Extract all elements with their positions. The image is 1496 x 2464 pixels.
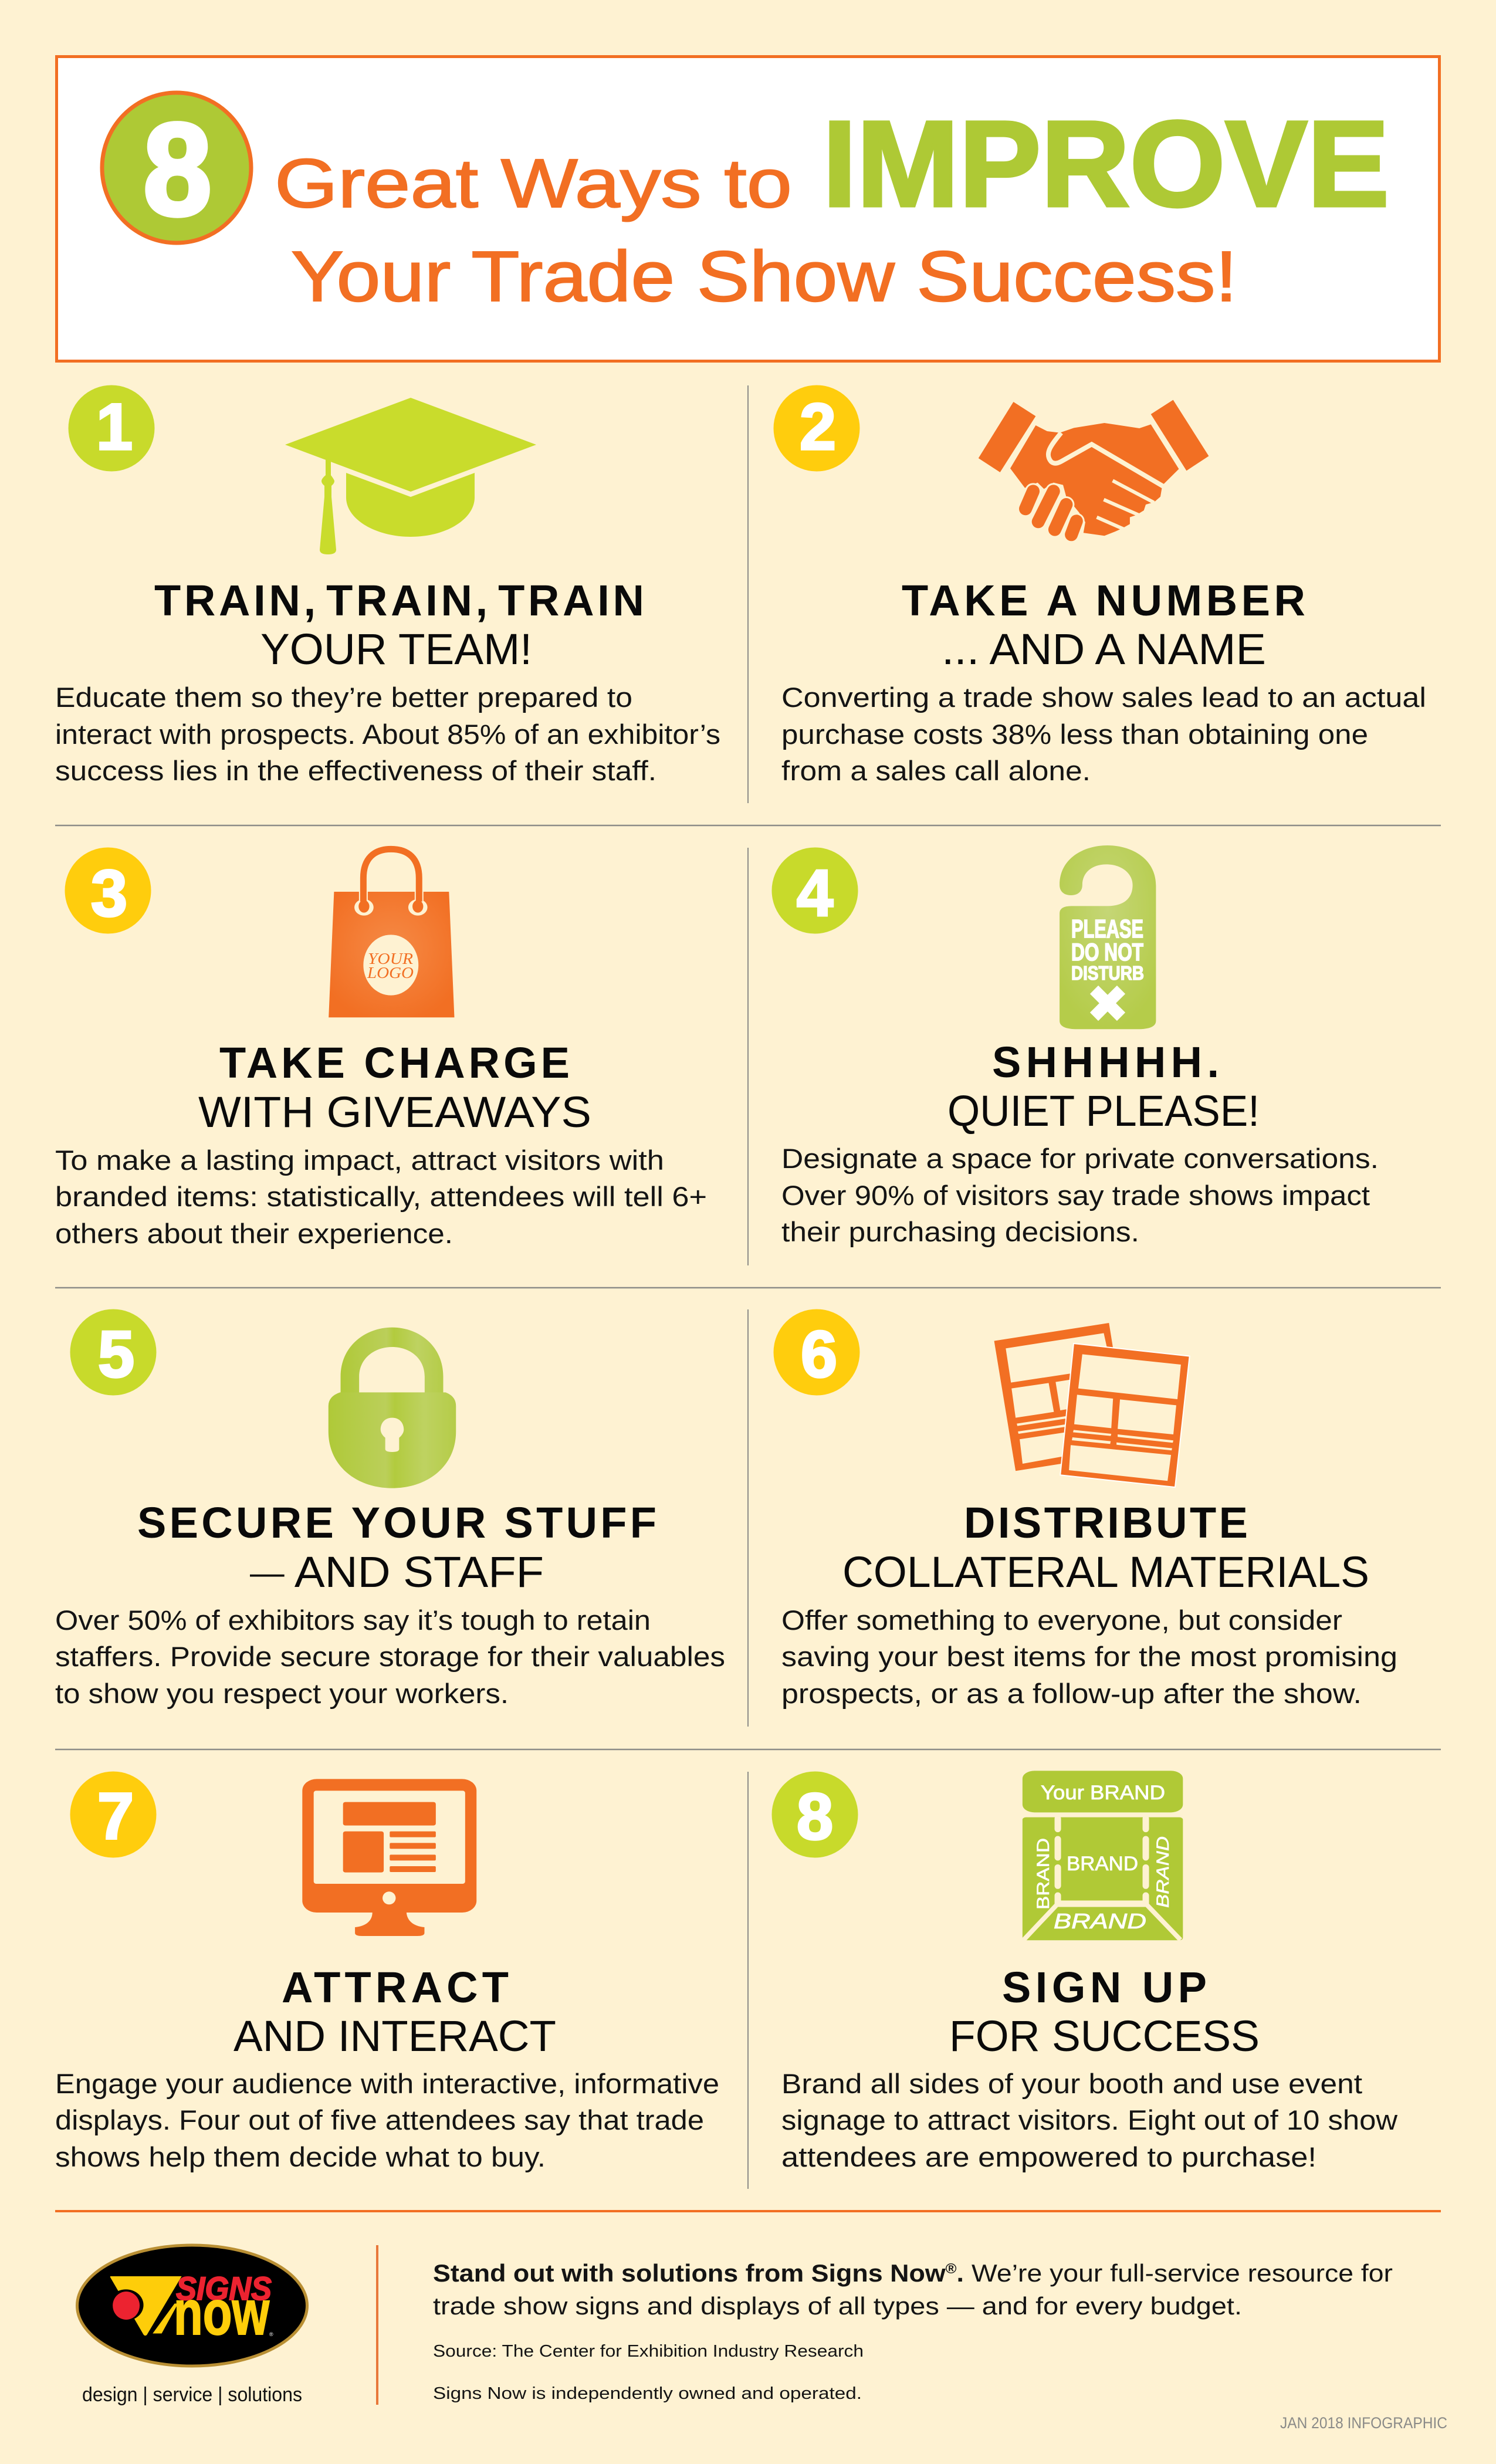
icon: shopping bag <box>329 849 454 1017</box>
heading <box>198 1038 591 1136</box>
icon: branded booth <box>1023 1771 1183 1940</box>
panel: title header <box>56 56 1440 361</box>
icon: handshake <box>979 400 1209 536</box>
tagline: design | service | solutions <box>82 2384 302 2406</box>
panel: step 2 take a number <box>773 385 1426 786</box>
number badge 8 <box>772 1772 858 1857</box>
heading <box>137 1498 656 1596</box>
body text <box>55 682 720 786</box>
ownership note: Signs Now is independently owned and operated. <box>433 2384 862 2403</box>
body text: success lies in the effectiveness of their staff. <box>55 755 656 786</box>
body text: purchase costs 38% less than obtaining one <box>781 719 1368 750</box>
number badge 6: 6 <box>801 1318 837 1391</box>
body text: Over 90% of visitors say trade shows impact <box>781 1180 1370 1211</box>
number badge 5: 5 <box>98 1318 134 1391</box>
body text <box>55 1605 725 1709</box>
number badge 3 <box>65 847 151 934</box>
body text: Educate them so they’re better prepared to <box>55 682 632 713</box>
heading: AND STAFF <box>285 1548 544 1596</box>
number badge 7: 7 <box>97 1779 134 1853</box>
body text <box>55 1145 707 1249</box>
title line one: Great Ways to <box>275 145 792 222</box>
panel: step 5 secure <box>55 1309 725 1709</box>
body text: shows help them decide what to buy. <box>55 2141 546 2172</box>
heading: YOUR TEAM! <box>260 625 532 673</box>
date stamp: JAN 2018 INFOGRAPHIC <box>1280 2414 1447 2432</box>
icon: branded booth: BRAND <box>1153 1836 1173 1908</box>
icon: branded booth: Your BRAND <box>1041 1782 1165 1804</box>
panel: step 8 sign up <box>772 1771 1398 2172</box>
title line one <box>275 96 1389 232</box>
body text: displays. Four out of five attendees say that trade <box>55 2104 704 2135</box>
body text <box>781 2068 1398 2172</box>
body text: others about their experience. <box>55 1218 453 1249</box>
panel: step 1 train <box>55 385 720 786</box>
number badge 8: 8 <box>797 1780 833 1853</box>
body text <box>781 1605 1397 1709</box>
body text <box>781 1143 1379 1247</box>
footer call to action <box>433 2259 1393 2320</box>
footer divider <box>376 2245 378 2405</box>
heading: TAKE A NUMBER <box>902 576 1305 625</box>
icon: door hanger <box>1060 845 1156 1029</box>
icon: door hanger: DO NOT <box>1071 938 1143 966</box>
body text: Brand all sides of your booth and use event <box>781 2068 1362 2099</box>
number badge 6 <box>773 1309 860 1395</box>
heading: SECURE YOUR STUFF <box>137 1498 656 1547</box>
icon: door hanger: DISTURB <box>1071 962 1144 984</box>
badge: big number 8 <box>102 93 251 243</box>
logo: Signs Now oval: now <box>174 2277 270 2348</box>
body text: saving your best items for the most promising <box>781 1641 1397 1672</box>
body text: prospects, or as a follow-up after the show. <box>781 1678 1362 1709</box>
body text: branded items: statistically, attendees will tell 6+ <box>55 1181 707 1212</box>
icon: monitor <box>302 1779 476 1936</box>
heading <box>154 576 644 673</box>
number badge 2 <box>773 385 860 472</box>
heading: FOR SUCCESS <box>949 2012 1260 2060</box>
number badge 2: 2 <box>800 390 836 463</box>
heading: COLLATERAL MATERIALS <box>842 1548 1369 1596</box>
number badge 3: 3 <box>91 857 127 930</box>
logo: Signs Now oval: SIGNS <box>176 2270 272 2307</box>
panel: step 3 giveaways <box>55 847 707 1249</box>
heading <box>947 1038 1260 1135</box>
icon: brochures <box>994 1323 1190 1487</box>
body text: Over 50% of exhibitors say it’s tough to retain <box>55 1605 651 1636</box>
number badge 4 <box>772 847 858 934</box>
number badge 1 <box>68 385 155 472</box>
title line one: IMPROVE <box>823 96 1389 232</box>
heading <box>842 1498 1369 1596</box>
footer call to action: . <box>957 2259 964 2287</box>
heading: TRAIN, TRAIN, TRAIN <box>154 576 644 625</box>
heading: ATTRACT <box>282 1963 509 2012</box>
body text: their purchasing decisions. <box>781 1216 1139 1247</box>
footer call to action: Stand out with solutions from Signs Now <box>433 2259 913 2287</box>
icon: branded booth: BRAND <box>1034 1838 1053 1910</box>
icon: branded booth: BRAND <box>1067 1853 1138 1875</box>
logo: Signs Now oval: ® <box>269 2331 273 2337</box>
panel: footer <box>77 2245 1447 2432</box>
number badge 7 <box>70 1772 156 1857</box>
icon: padlock <box>329 1328 456 1488</box>
icon: shopping bag: YOUR <box>368 950 414 967</box>
source note: Source: The Center for Exhibition Industry Research <box>433 2342 864 2361</box>
divider lines <box>55 385 1441 2211</box>
title line two: Your Trade Show Success! <box>291 236 1237 316</box>
heading: WITH GIVEAWAYS <box>198 1088 591 1136</box>
heading: DISTRIBUTE <box>964 1498 1248 1547</box>
heading: SHHHHH. <box>992 1038 1219 1087</box>
body text: staffers. Provide secure storage for their valuables <box>55 1641 725 1672</box>
badge: big number 8: 8 <box>143 96 212 243</box>
body text: Offer something to everyone, but consider <box>781 1605 1342 1636</box>
icon: branded booth: BRAND <box>1054 1909 1146 1933</box>
body text: from a sales call alone. <box>781 755 1091 786</box>
heading <box>902 576 1305 673</box>
footer call to action: trade show signs and displays of all types — and for every budget. <box>433 2292 1242 2320</box>
number badge 4: 4 <box>797 857 833 930</box>
body text <box>55 2068 719 2172</box>
footer call to action: ® <box>946 2261 957 2277</box>
heading: — <box>250 1554 285 1591</box>
number badge 5 <box>70 1309 156 1395</box>
footer call to action: We’re your full-service resource for <box>972 2259 1393 2287</box>
body text <box>781 682 1426 786</box>
body text: signage to attract visitors. Eight out of 10 show <box>781 2104 1398 2135</box>
icon: door hanger: PLEASE <box>1071 915 1143 943</box>
heading: AND INTERACT <box>233 2012 556 2060</box>
icon: graduation cap <box>285 398 536 554</box>
body text: To make a lasting impact, attract visitors with <box>55 1145 664 1176</box>
body text: to show you respect your workers. <box>55 1678 509 1709</box>
number badge 1: 1 <box>96 390 133 463</box>
body text: interact with prospects. About 85% of an exhibitor’s <box>55 719 720 750</box>
panel: step 6 collateral <box>773 1309 1397 1709</box>
logo: Signs Now oval <box>77 2245 307 2366</box>
panel: step 4 quiet please <box>772 845 1379 1247</box>
body text: Engage your audience with interactive, informative <box>55 2068 719 2099</box>
heading <box>233 1963 556 2060</box>
heading <box>949 1963 1260 2060</box>
heading: QUIET PLEASE! <box>947 1087 1260 1135</box>
body text: Converting a trade show sales lead to an actual <box>781 682 1426 713</box>
heading: TAKE CHARGE <box>219 1038 570 1087</box>
heading: SIGN UP <box>1002 1963 1207 2012</box>
body text: attendees are empowered to purchase! <box>781 2141 1316 2172</box>
panel: step 7 attract <box>55 1772 719 2172</box>
heading: ... AND A NAME <box>942 625 1266 673</box>
body text: Designate a space for private conversations. <box>781 1143 1379 1174</box>
icon: shopping bag: LOGO <box>367 964 414 981</box>
